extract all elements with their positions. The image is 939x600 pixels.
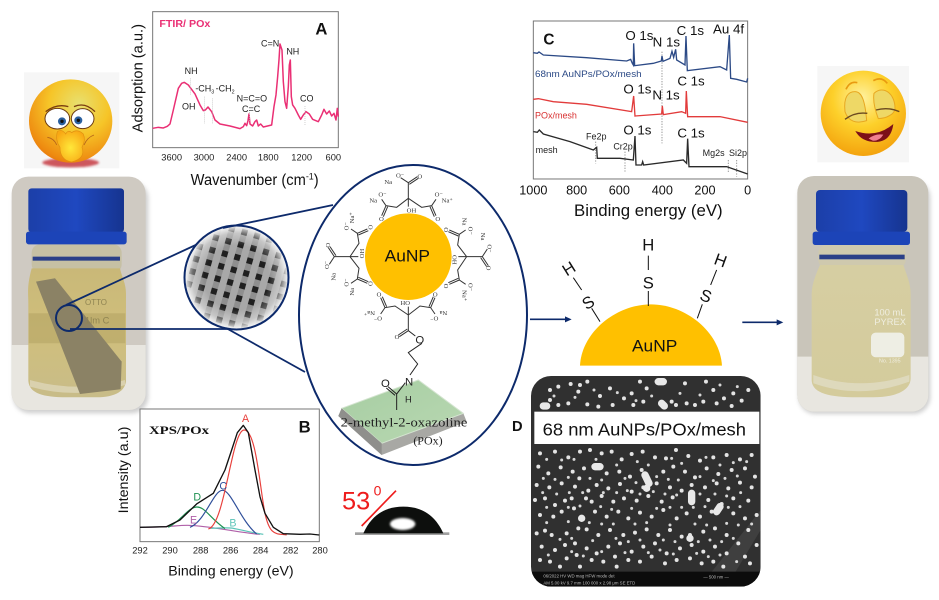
AuNP dome with thiol groups: H bbox=[642, 235, 654, 254]
citrate ligand: right: O⁻ bbox=[466, 283, 473, 292]
panel A: FTIR chart: NH bbox=[185, 66, 198, 76]
arrow: to clean bottle bbox=[742, 319, 783, 325]
panel C: XPS survey chart: 68nm AuNPs/POx/mesh bbox=[535, 69, 642, 79]
x axis label: Binding energy (eV) bbox=[574, 201, 723, 220]
panel C: XPS survey chart: O 1s bbox=[623, 122, 652, 137]
peak C bbox=[190, 490, 257, 534]
AuNP dome with thiol groups: H bbox=[712, 249, 729, 271]
red survey spectrum bbox=[533, 91, 748, 122]
panel A: FTIR chart: OH bbox=[182, 101, 195, 111]
panel C: XPS survey chart: POx/mesh bbox=[535, 111, 577, 121]
citrate ligand: left: O⁻ bbox=[343, 278, 350, 287]
icon: disgusted emoji pinching nose bbox=[24, 72, 119, 168]
panel A: FTIR chart: -CH bbox=[216, 84, 232, 94]
y axis label: Adsorption (a.u.) bbox=[131, 24, 147, 132]
peak E bbox=[140, 525, 260, 534]
contact angle droplet: 0 bbox=[374, 482, 382, 498]
citrate ligand: left bbox=[324, 212, 375, 296]
panel C: XPS survey chart: mesh bbox=[536, 145, 558, 155]
panel A: FTIR chart: N=C=O bbox=[237, 94, 267, 104]
panel A: FTIR chart: CO bbox=[300, 94, 313, 104]
peak D bbox=[168, 507, 225, 529]
citrate ligand: right: Na bbox=[479, 233, 486, 240]
citrate ligand: bottom: OH bbox=[400, 299, 410, 306]
blue survey spectrum bbox=[533, 35, 748, 82]
citrate ligand: bottom: O bbox=[394, 333, 399, 340]
panel C: XPS survey chart: 400 bbox=[652, 183, 673, 197]
panel A: FTIR chart: C=N bbox=[261, 38, 279, 48]
total envelope bbox=[140, 425, 319, 535]
citrate ligand: left: O bbox=[368, 281, 375, 286]
photo: clean bottle after treatment: 100 mL bbox=[874, 308, 905, 318]
citrate ligand: top: O bbox=[435, 216, 440, 223]
panel B: XPS C1s chart: A bbox=[242, 413, 250, 425]
panel letter C: C bbox=[543, 31, 554, 48]
citrate ligand: left: O⁻ bbox=[324, 260, 331, 269]
panel C: XPS survey chart: C 1s bbox=[677, 23, 704, 38]
black survey spectrum bbox=[533, 130, 748, 174]
panel C: XPS survey chart: 1000 bbox=[519, 183, 547, 197]
citrate ligand: right: O bbox=[485, 266, 492, 271]
icon: happy emoji bbox=[817, 66, 909, 162]
panel C: XPS survey chart: Si2p bbox=[729, 148, 747, 158]
x axis label: ) bbox=[314, 172, 319, 189]
panel C: XPS survey chart: C 1s bbox=[677, 74, 705, 89]
zoom lines linking mesh to molecule ellipse bbox=[223, 205, 333, 372]
citrate ligand: right: O⁻ bbox=[486, 244, 493, 253]
panel C: XPS survey chart: Fe2p bbox=[586, 132, 606, 142]
AuNP dome with thiol groups: S bbox=[643, 273, 654, 292]
citrate ligand: top: O⁻ bbox=[378, 192, 387, 199]
citrate ligand: top: Na bbox=[369, 197, 377, 204]
mesh SEM inset circle bbox=[184, 226, 288, 330]
AuNP dome with thiol groups bbox=[559, 235, 729, 366]
panel B: XPS C1s chart: E bbox=[190, 515, 197, 527]
photo: bottle with mesh in malodorous solution: OTTO bbox=[85, 298, 107, 307]
citrate ligand: left: Na⁺ bbox=[349, 212, 356, 223]
panel C: XPS survey chart: Au 4f bbox=[713, 22, 744, 37]
panel A: FTIR chart: -CH bbox=[195, 84, 211, 94]
citrate ligand: top: O bbox=[417, 173, 422, 180]
citrate ligand: right: OH bbox=[451, 255, 458, 265]
citrate ligand: bottom: O⁻ bbox=[430, 315, 438, 322]
x axis label: Wavenumber (cm bbox=[191, 172, 311, 189]
citrate ligand: left: O⁻ bbox=[343, 222, 350, 230]
panel D: SEM micrograph bbox=[512, 376, 761, 587]
panel B: XPS C1s chart: 288 bbox=[193, 546, 208, 556]
panel A: FTIR chart: NH bbox=[286, 47, 299, 57]
FTIR spectrum curve bbox=[153, 44, 338, 129]
panel D: SEM micrograph: 06/2022 HV WD mag HFW mode det bbox=[543, 573, 615, 578]
panel A: FTIR chart: C=C bbox=[242, 104, 261, 114]
photo: clean bottle after treatment: PYREX bbox=[874, 317, 907, 327]
panel C: XPS survey chart: N 1s bbox=[652, 87, 680, 102]
POx label: 2-methyl-2-oxazoline bbox=[341, 416, 468, 430]
panel A: FTIR chart: 3600 bbox=[161, 152, 182, 162]
arrow: to thiol reaction bbox=[530, 316, 572, 322]
citrate ligand: right: O bbox=[442, 284, 449, 289]
citrate ligand: left: OH bbox=[359, 249, 366, 258]
panel A: FTIR chart: 3 bbox=[211, 89, 214, 95]
panel D: SEM micrograph: AM 5.00 kV 9.7 mm 100 000 x 2.98 μm SE ETD bbox=[543, 580, 635, 585]
x axis label: -1 bbox=[306, 172, 314, 182]
panel A: FTIR chart: 2 bbox=[232, 89, 235, 95]
citrate ligand: bottom: O bbox=[433, 290, 438, 297]
panel C: XPS survey chart: Cr2p bbox=[613, 142, 633, 152]
citrate ligand: right: O bbox=[442, 227, 449, 232]
SEM caption box bbox=[534, 412, 759, 444]
photo: bottle with mesh in malodorous solution bbox=[12, 177, 148, 413]
citrate ligand: top: O⁻ bbox=[435, 192, 443, 199]
AuNP dome with thiol groups: S bbox=[697, 285, 714, 307]
peak A bbox=[208, 430, 287, 535]
citrate ligand: top bbox=[369, 172, 453, 223]
panel C: XPS survey chart: Mg2s bbox=[703, 148, 725, 158]
panel letter B: B bbox=[299, 418, 311, 437]
panel A: FTIR chart: 2400 bbox=[226, 152, 247, 162]
panel A: FTIR chart: 1800 bbox=[258, 152, 279, 162]
panel letter A: A bbox=[315, 19, 327, 38]
panel C: XPS survey chart: 600 bbox=[609, 183, 630, 197]
POx substrate plate bbox=[338, 380, 467, 455]
panel B: XPS C1s chart: 292 bbox=[132, 546, 148, 556]
panel C: XPS survey chart: 200 bbox=[694, 183, 716, 197]
panel B: XPS C1s chart: 280 bbox=[312, 546, 328, 556]
panel C: XPS survey chart: 0 bbox=[744, 183, 751, 197]
citrate ligand: top: Na⁺ bbox=[442, 197, 453, 204]
photo: bottle with mesh in malodorous solution: 1lm C bbox=[85, 315, 110, 325]
SEM caption box: 68 nm AuNPs/POx/mesh bbox=[543, 420, 746, 440]
peak B bbox=[210, 528, 263, 534]
panel B: XPS C1s chart: 290 bbox=[162, 546, 178, 556]
panel letter D: D bbox=[512, 419, 523, 435]
linker chain bbox=[381, 331, 424, 410]
citrate ligand: right bbox=[442, 218, 493, 302]
citrate ligand: top: Na bbox=[384, 179, 392, 186]
chart title: FTIR/ POx bbox=[159, 19, 211, 30]
panel C: XPS survey chart: O 1s bbox=[623, 82, 652, 97]
citrate ligand: left: O bbox=[325, 243, 332, 248]
panel A: FTIR chart: 1200 bbox=[291, 152, 312, 162]
citrate ligand: right: O⁻ bbox=[466, 227, 473, 235]
panel B: XPS C1s chart: B bbox=[229, 518, 236, 530]
AuNP dome with thiol groups: AuNP bbox=[632, 337, 677, 356]
citrate ligand: right: Na bbox=[461, 218, 468, 225]
molecule ellipse with AuNP and citrate bbox=[299, 165, 527, 465]
citrate ligand: left: O bbox=[368, 225, 375, 230]
citrate ligand: bottom: Na bbox=[440, 309, 447, 316]
citrate ligand: bottom: O⁻ bbox=[373, 315, 382, 322]
linker chain: O bbox=[381, 378, 390, 390]
photo: clean bottle after treatment: No. 1395 bbox=[879, 359, 901, 365]
molecule ellipse with AuNP and citrate: (POx) bbox=[413, 433, 443, 447]
linker chain: N bbox=[405, 377, 413, 389]
panel B: XPS C1s chart: D bbox=[193, 492, 201, 504]
citrate ligand: top: OH bbox=[407, 207, 416, 214]
citrate ligand: bottom: O bbox=[376, 290, 381, 297]
panel B: XPS C1s chart: 286 bbox=[223, 546, 238, 556]
panel D: SEM micrograph: — 500 nm — bbox=[703, 574, 729, 579]
panel A: FTIR chart: 3000 bbox=[194, 152, 214, 162]
panel A: FTIR chart: 600 bbox=[326, 152, 341, 162]
panel C: XPS survey chart: N 1s bbox=[653, 35, 680, 50]
linker chain: H bbox=[405, 394, 412, 404]
x axis label: Binding energy (eV) bbox=[168, 564, 294, 579]
citrate ligand: bottom bbox=[363, 290, 447, 340]
gold nanoparticle circle bbox=[365, 213, 452, 300]
AuNP dome with thiol groups: S bbox=[579, 292, 598, 314]
contact angle droplet: 53 bbox=[342, 487, 370, 515]
linker chain: O bbox=[415, 334, 424, 346]
panel B: XPS C1s chart: C bbox=[219, 480, 227, 492]
citrate ligand: right: Na⁺ bbox=[461, 290, 468, 302]
citrate ligand: top: O bbox=[379, 216, 384, 223]
panel B: XPS C1s chart: 284 bbox=[253, 546, 268, 556]
AuNP dome with thiol groups: H bbox=[559, 258, 579, 280]
y axis label: Intensity (a.u) bbox=[116, 427, 131, 513]
icon: magnifier circle on bottle bbox=[56, 305, 82, 331]
panel A: FTIR chart bbox=[131, 12, 341, 189]
chart title: XPS/POx bbox=[149, 424, 209, 437]
citrate ligand: left: Na bbox=[331, 273, 338, 281]
photo: clean bottle after treatment bbox=[797, 176, 930, 414]
gold nanoparticle circle: AuNP bbox=[385, 247, 430, 266]
citrate ligand: left: Na bbox=[349, 288, 356, 296]
panel C: XPS survey chart: O 1s bbox=[625, 28, 654, 43]
magnifier lines linking bottle to mesh bbox=[66, 243, 228, 329]
panel B: XPS C1s chart: 282 bbox=[283, 546, 298, 556]
panel C: XPS survey chart: 800 bbox=[566, 183, 587, 197]
panel C: XPS survey chart: C 1s bbox=[677, 125, 705, 140]
panel C: XPS survey chart bbox=[519, 21, 751, 220]
citrate ligand: bottom: Na⁺ bbox=[363, 309, 375, 316]
citrate ligand: top: O⁻ bbox=[396, 172, 405, 179]
panel B: XPS C1s chart bbox=[116, 409, 328, 579]
contact angle droplet bbox=[342, 482, 449, 535]
